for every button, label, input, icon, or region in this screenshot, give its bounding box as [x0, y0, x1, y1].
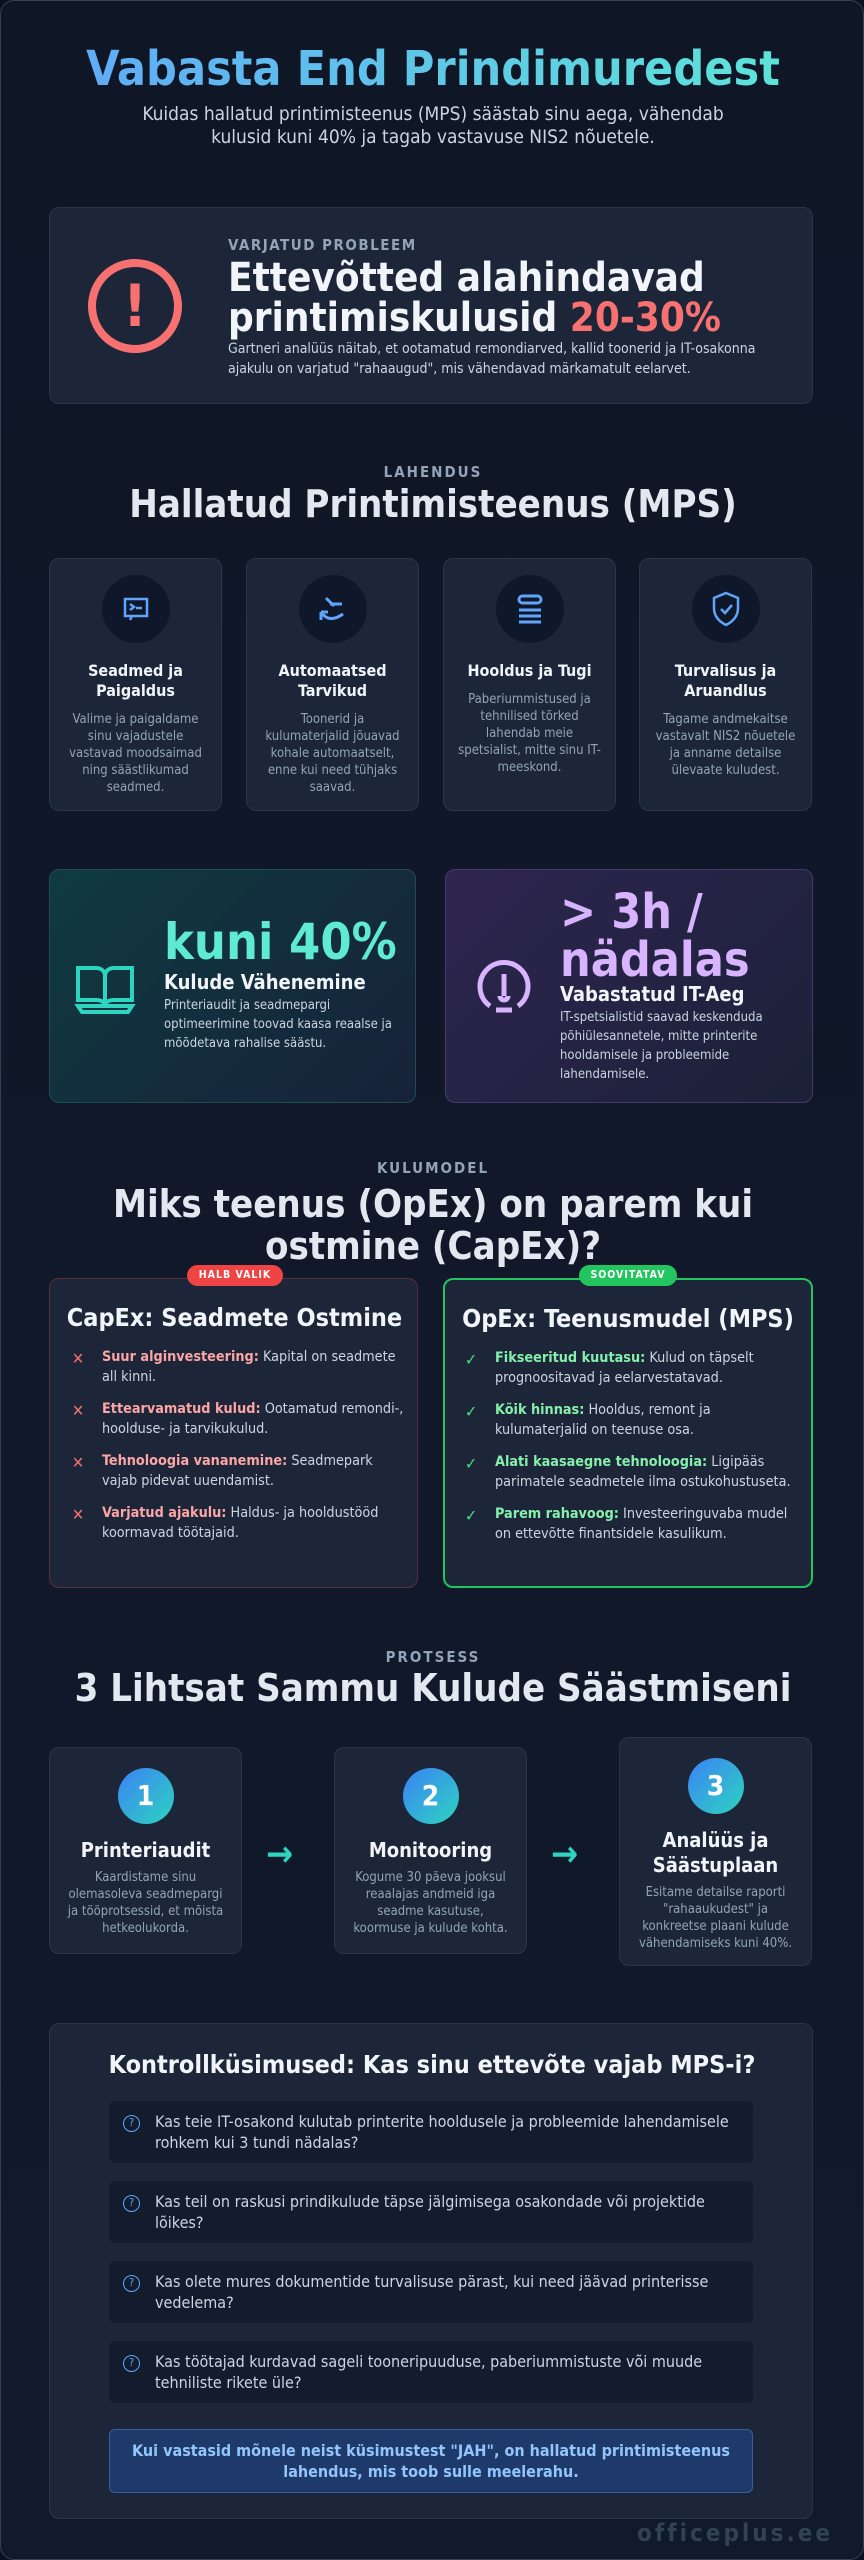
opex title: OpEx: Teenusmudel (MPS): [462, 1304, 794, 1333]
title: Vabasta End Prindimuredest: [86, 41, 780, 97]
panel: service 3: Hooldus ja Tugi: [467, 661, 592, 680]
capex list: ✕: [72, 1505, 84, 1524]
section label: protsess: PROTSESS: [386, 1648, 480, 1666]
heading: opex vs capex: Miks teenus (OpEx) on parem kui: [113, 1182, 753, 1226]
question 1: [109, 2101, 753, 2163]
callout: conclusion: lahendus, mis toob sulle meelerahu.: [283, 2462, 579, 2481]
opex list: ✓: [465, 1454, 477, 1473]
heading: steps: 3 Lihtsat Sammu Kulude Säästmiseni: [75, 1666, 791, 1710]
step 3: Säästuplaan: [653, 1853, 778, 1877]
stat number: nädalas: [560, 932, 750, 988]
opex list: ✓: [465, 1506, 477, 1525]
section label: lahendus: LAHENDUS: [384, 463, 482, 481]
step 3: [619, 1737, 812, 1966]
question 3: Kas olete mures dokumentide turvalisuse pärast, kui need jäävad printerisse vedelema?: [155, 2272, 708, 2312]
panel: stat 3h: [445, 869, 813, 1103]
panel: service 4: Aruandlus: [684, 681, 767, 700]
icon: devices: [102, 575, 170, 643]
icon: clock: [478, 960, 530, 1012]
badge: soovitatav: [579, 1265, 677, 1286]
question 2: ?: [129, 2196, 134, 2209]
stat title: Vabastatud IT-Aeg: [560, 982, 745, 1006]
step 2: 2: [422, 1779, 439, 1812]
question 2: Kas teil on raskusi prindikulude täpse jälgimisega osakondade või projektide lõikes?: [155, 2192, 705, 2232]
panel: service 1: [49, 558, 222, 811]
arrow 2: →: [551, 1834, 578, 1875]
heading: opex vs capex: ostmine (CapEx)?: [265, 1224, 601, 1268]
icon: book: [74, 966, 136, 1014]
step 1: Kaardistame sinu olemasoleva seadmepargi ja tööprotsessid, et mõista hetkeolukorda.: [68, 1870, 223, 1936]
heading: opex vs capex: [113, 1182, 753, 1268]
badge: soovitatav: SOOVITATAV: [590, 1269, 666, 1281]
panel: problem: [49, 207, 813, 404]
question 4: [109, 2341, 753, 2403]
problem label: VARJATUD PROBLEEM: [228, 236, 417, 254]
icon: warning: [88, 259, 182, 353]
step 1: 1: [137, 1779, 154, 1812]
panel: service 4: Turvalisus ja: [675, 661, 776, 680]
checklist title: Kontrollküsimused: Kas sinu ettevõte vajab MPS-i?: [109, 2050, 755, 2079]
opex list: ✓: [465, 1350, 477, 1369]
capex list: ✕: [72, 1349, 84, 1368]
stat number: > 3h /: [560, 884, 703, 940]
question 4: ?: [129, 2356, 134, 2369]
callout: conclusion: [109, 2429, 753, 2493]
opex list: Kõik hinnas: Hooldus, remont ja kulumaterjalid on teenuse osa.: [495, 1402, 711, 1438]
section label: kulumudel: KULUMODEL: [377, 1159, 489, 1177]
question 2: [109, 2181, 753, 2243]
opex list: Parem rahavoog: Investeeringuvaba mudel on ettevõtte finantsidele kasulikum.: [495, 1506, 787, 1542]
problem headline: printimiskulusid 20-30%: [228, 295, 721, 341]
question 1: ?: [129, 2116, 134, 2129]
panel: service 1: Seadmed ja: [88, 661, 183, 680]
opex list: Alati kaasaegne tehnoloogia: Ligipääs parimatele seadmetele ilma ostukohustuseta.: [495, 1454, 791, 1490]
panel: service 1: Paigaldus: [96, 681, 175, 700]
icon: auto: [298, 575, 366, 643]
step 3: Esitame detailse raporti "rahaaukudest" ja konkreetse plaani kulude vähendamiseks kuni 40%.: [639, 1885, 792, 1951]
opex list: [465, 1350, 791, 1542]
capex list: Varjatud ajakulu: Haldus- ja hooldustööd koormavad töötajaid.: [102, 1505, 378, 1541]
capex list: ✕: [72, 1401, 84, 1420]
icon: warning: !: [123, 272, 147, 340]
step 2: Monitooring: [369, 1838, 492, 1862]
panel: service 2: Automaatsed: [278, 661, 387, 680]
capex title: CapEx: Seadmete Ostmine: [67, 1303, 402, 1332]
callout: conclusion: Kui vastasid mõnele neist küsimustest "JAH", on hallatud printimisteenus: [132, 2441, 730, 2460]
question 4: Kas töötajad kurdavad sageli tooneripuuduse, paberiummistuste või muude tehniliste rikete üle?: [155, 2352, 702, 2392]
step 2: [334, 1747, 527, 1954]
panel: stat 40%: [49, 869, 416, 1103]
problem headline: Ettevõtted alahindavad: [228, 255, 705, 301]
panel: service 4: [639, 558, 812, 811]
capex list: Ettearvamatud kulud: Ootamatud remondi-, hoolduse- ja tarvikukulud.: [102, 1401, 403, 1437]
stat text: Printeriaudit ja seadmepargi optimeerimine toovad kaasa reaalse ja mõõdetava rahalise säästu.: [164, 998, 392, 1051]
capex list: ✕: [72, 1453, 84, 1472]
arrow 1: →: [266, 1834, 293, 1875]
panel: checklist: [49, 2023, 813, 2519]
step 3: Analüüs ja: [663, 1828, 768, 1852]
step 2: Kogume 30 päeva jooksul reaalajas andmeid iga seadme kasutuse, koormuse ja kulude kohta.: [353, 1870, 508, 1936]
panel: service 2: Toonerid ja kulumaterjalid jõuavad kohale automaatselt, enne kui need tühjaks saavad.: [265, 712, 400, 795]
heading: MPS: Hallatud Printimisteenus (MPS): [129, 482, 737, 526]
opex list: Fikseeritud kuutasu: Kulud on täpselt prognoositavad ja eelarvestatavad.: [495, 1350, 754, 1386]
capex list: [72, 1349, 403, 1541]
step 1: Printeriaudit: [81, 1838, 210, 1862]
subtitle: Kuidas hallatud printimisteenus (MPS) säästab sinu aega, vähendab kulusid kuni 40% ja tagab vastavuse NIS2 nõuetele.: [142, 103, 724, 148]
question 3: ?: [129, 2276, 134, 2289]
problem text: Gartneri analüüs näitab, et ootamatud remondiarved, kallid toonerid ja IT-osakonna ajakulu on varjatud "rahaaugud", mis vähendavad märkamatult eelarvet.: [228, 341, 755, 377]
stat number: [560, 884, 750, 988]
badge: halb valik: HALB VALIK: [199, 1269, 271, 1281]
step 3: 3: [707, 1769, 724, 1802]
panel: service 2: [246, 558, 419, 811]
panel: service 1: Valime ja paigaldame sinu vajadustele vastavad moodsaimad ning säästlikumad seadmed.: [69, 712, 202, 795]
stat title: Kulude Vähenemine: [164, 970, 366, 994]
footer brand: officeplus.ee: [637, 2519, 833, 2547]
badge: halb valik: [187, 1265, 283, 1286]
icon: shield: [692, 575, 760, 643]
stat number: kuni 40%: [164, 913, 397, 971]
question 3: [109, 2261, 753, 2323]
capex list: Suur alginvesteering: Kapital on seadmete all kinni.: [102, 1349, 396, 1385]
panel: service 2: Tarvikud: [298, 681, 367, 700]
opex list: ✓: [465, 1402, 477, 1421]
problem headline: [228, 255, 721, 341]
stat text: IT-spetsialistid saavad keskenduda põhiülesannetele, mitte printerite hooldamisele ja probleemide lahendamisele.: [560, 1010, 763, 1082]
panel: capex: [49, 1278, 418, 1588]
panel: service 3: [443, 558, 616, 811]
icon: stack: [496, 575, 564, 643]
capex list: Tehnoloogia vananemine: Seadmepark vajab pidevat uuendamist.: [102, 1453, 373, 1489]
question 1: Kas teie IT-osakond kulutab printerite hooldusele ja probleemide lahendamisele rohkem kui 3 tundi nädalas?: [155, 2112, 729, 2152]
panel: opex: [443, 1278, 813, 1588]
panel: service 3: Paberiummistused ja tehnilised tõrked lahendab meie spetsialist, mitte sinu IT-meeskond.: [458, 692, 601, 775]
panel: service 4: Tagame andmekaitse vastavalt NIS2 nõuetele ja anname detailse ülevaate kuludest.: [656, 712, 795, 778]
step 1: [49, 1747, 242, 1954]
